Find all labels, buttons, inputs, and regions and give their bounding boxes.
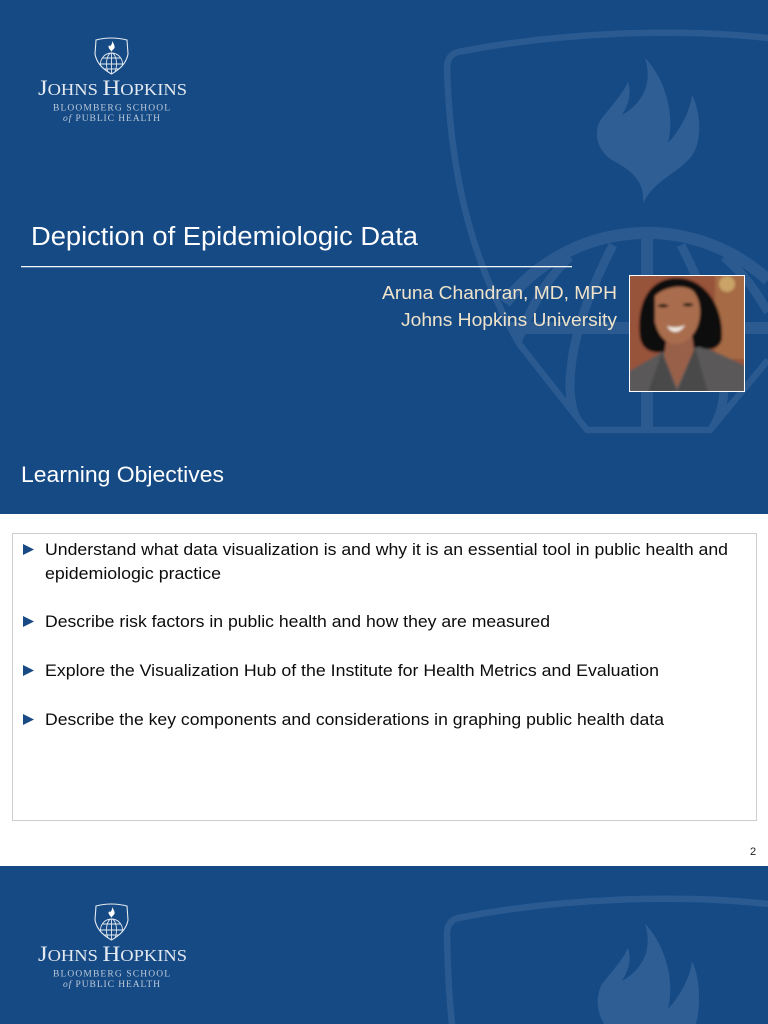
objective 3: Explore the Visualization Hub of the Institute for Health Metrics and Evaluation	[45, 662, 659, 680]
title: Depiction of Epidemiologic Data	[31, 223, 419, 251]
Johns Hopkins logo, footer	[38, 904, 187, 990]
bottom blue footer panel	[0, 866, 768, 1024]
presenter photo	[628, 274, 746, 393]
section heading: Learning Objectives: Learning Objectives	[21, 462, 224, 487]
presenter name and affiliation	[382, 282, 618, 330]
shield watermark, footer	[447, 899, 768, 1024]
Johns Hopkins logo, top	[38, 38, 187, 124]
top blue title panel	[0, 0, 768, 514]
panel: learning objectives list	[0, 514, 768, 866]
page number: 2	[750, 846, 756, 858]
presenter name and affiliation: Johns Hopkins University	[401, 309, 618, 330]
objective 4: Describe the key components and considerations in graphing public health data	[45, 711, 665, 729]
objective 2: Describe risk factors in public health and how they are measured	[45, 613, 550, 631]
presenter name and affiliation: Aruna Chandran, MD, MPH	[382, 282, 617, 303]
objective 1	[23, 541, 728, 583]
title divider	[21, 266, 572, 267]
shield watermark	[447, 33, 768, 430]
objective 1: epidemiologic practice	[45, 565, 221, 583]
objective 1: Understand what data visualization is and why it is an essential tool in public health and	[45, 541, 728, 559]
